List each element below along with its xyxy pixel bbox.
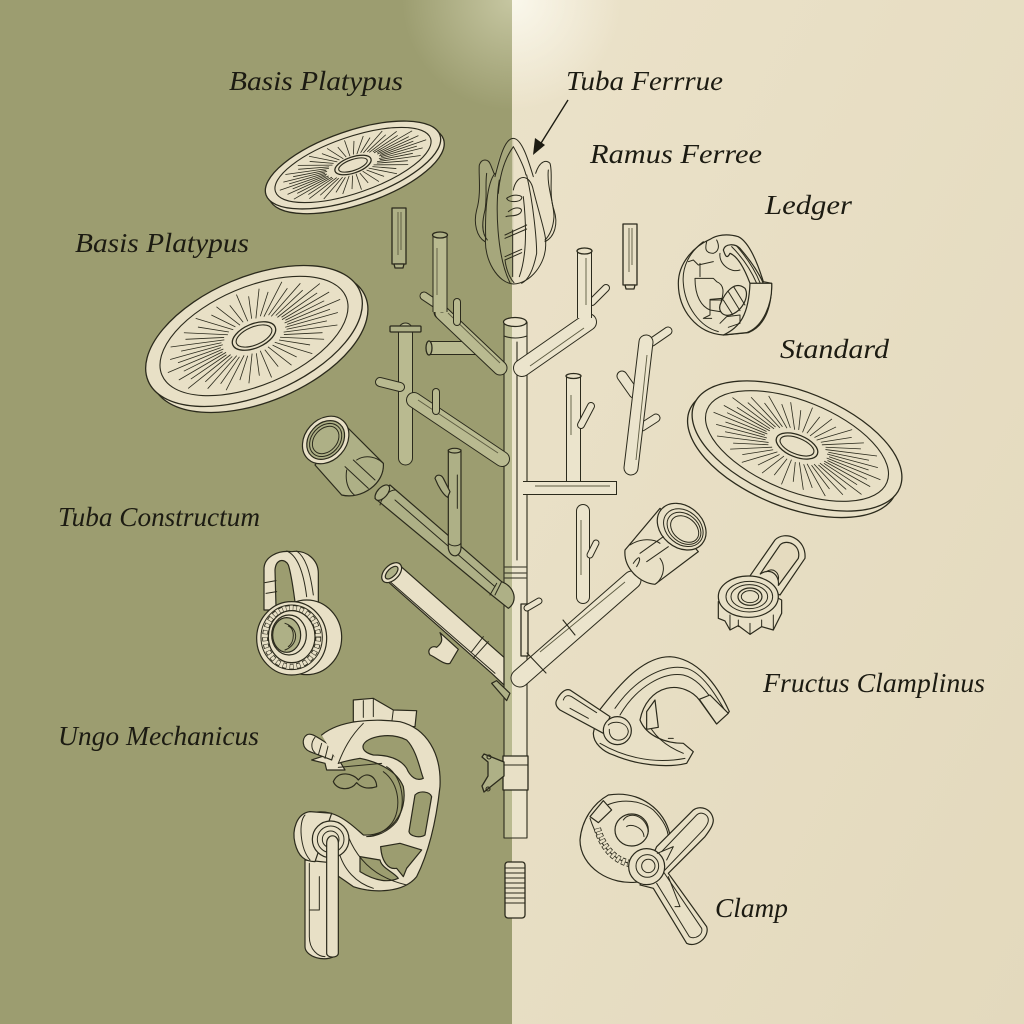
part: threaded stub bbox=[505, 862, 525, 918]
disc: right Standard bbox=[658, 346, 921, 545]
flower bud: Tuba Ferrrue bbox=[475, 138, 556, 284]
branch: upper left bbox=[424, 232, 500, 368]
background: olive left half bbox=[0, 0, 512, 1024]
branch: horizontal right with upright bbox=[523, 374, 617, 488]
pin: right bbox=[623, 224, 637, 289]
gear knob right bbox=[718, 536, 805, 634]
label: Fructus Clamplinus: Fructus Clamplinus bbox=[762, 668, 985, 698]
tube: main mast bbox=[503, 318, 528, 838]
bracket: small on mast bbox=[482, 754, 504, 792]
label: Basis Platypus top: Basis Platypus bbox=[229, 66, 403, 96]
label: Standard: Standard bbox=[780, 334, 890, 364]
arrow: to Tuba Ferrrue bbox=[533, 100, 568, 155]
branch: upper right bbox=[522, 248, 606, 368]
ledger clamp bbox=[678, 235, 772, 335]
label: Basis Platypus left: Basis Platypus bbox=[75, 228, 249, 258]
lamp: lower right tube bbox=[625, 494, 715, 584]
tube: short upright right bbox=[581, 511, 596, 597]
disc: large left Basis Platypus bbox=[110, 233, 389, 449]
label: Tuba Ferrrue: Tuba Ferrrue bbox=[566, 66, 723, 96]
padlock wheel left bbox=[257, 551, 342, 675]
clamp: Ungo Mechanicus bbox=[294, 698, 440, 959]
clamp: Fructus Clamplinus bbox=[556, 657, 729, 766]
disc: top Basis Platypus bbox=[240, 100, 455, 238]
background: cream right half bbox=[512, 0, 1024, 1024]
label: Ungo Mechanicus: Ungo Mechanicus bbox=[58, 721, 259, 751]
label: Ledger: Ledger bbox=[764, 190, 853, 220]
branch: lower left bbox=[378, 559, 510, 701]
branch: middle left bbox=[414, 392, 502, 459]
branch: T-piece left bbox=[380, 326, 421, 458]
label: Clamp: Clamp bbox=[715, 893, 788, 923]
tube: lower right branch bbox=[520, 580, 632, 678]
pin: left bbox=[392, 208, 406, 268]
stud: small spur by mast bbox=[521, 601, 539, 656]
label: Tuba Constructum: Tuba Constructum bbox=[58, 502, 260, 532]
label: Ramus Ferree: Ramus Ferree bbox=[589, 139, 762, 169]
clamp: Clamp wing nut bbox=[580, 794, 713, 944]
branch: Y tube right bbox=[622, 331, 668, 468]
lamp: left tube construct bbox=[293, 407, 514, 608]
